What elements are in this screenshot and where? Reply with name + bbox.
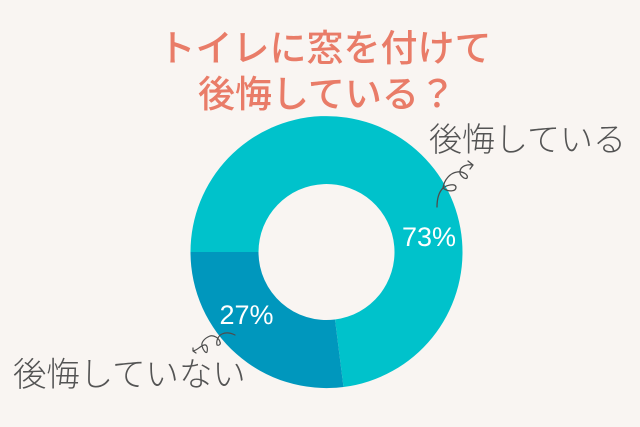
segment: 73% regret [190,116,462,387]
icon: curly arrow to no-regret label [193,333,235,353]
icon: curly arrow to regret label [437,161,473,207]
donut chart [190,116,462,388]
title: 後悔している？ [198,74,456,115]
label: no regret: 後悔していない [13,357,246,394]
segment: 27% no regret [190,252,344,388]
title: トイレに窓を付けて [158,28,492,69]
title [158,28,492,115]
value: 27%: 27% [219,300,274,330]
label: regret: 後悔している [429,121,626,158]
value: 73%: 73% [402,222,456,252]
